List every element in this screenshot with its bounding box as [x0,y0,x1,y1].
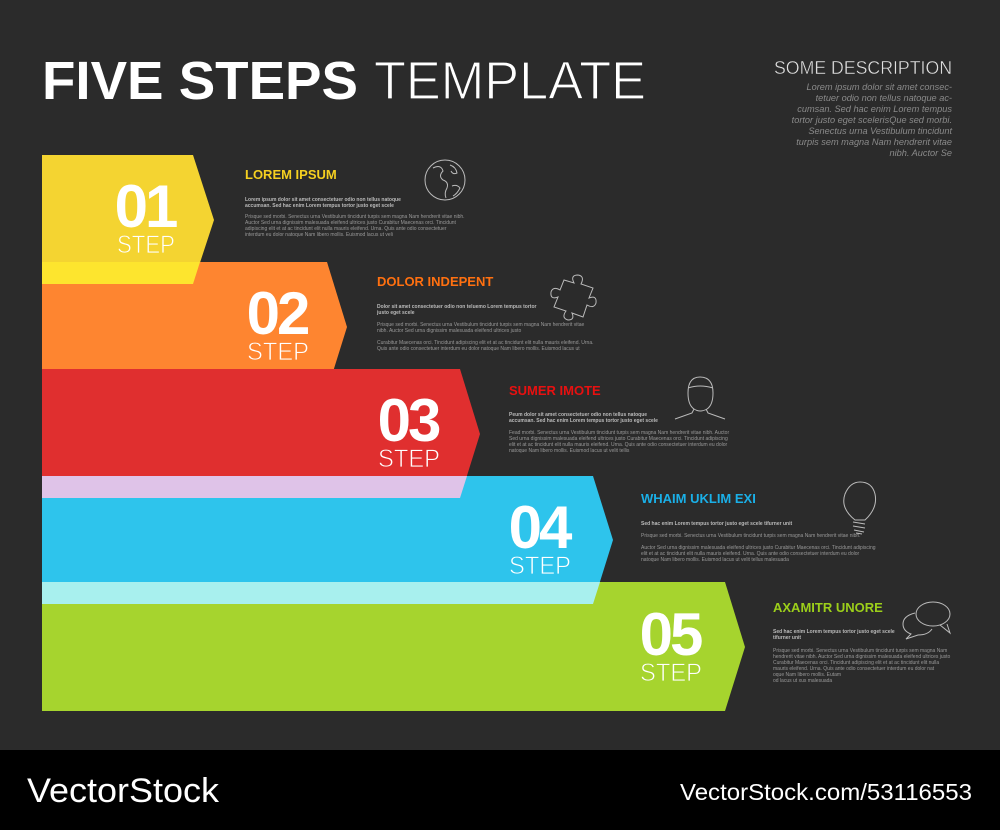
text block 5: Prisque sed morbi. Senectus urna Vestibulum tincidunt turpis sem magna Nam [773,648,947,654]
description block: Senectus urna Vestibulum tincidunt [808,126,952,136]
text block 4: elit et at ac tincidunt elit nulla mauris eleifend. Urna. Quis ante odio consectetuer interdum eu dolor [641,551,860,557]
text block 2: nibh. Auctor Sed urna dignissim malesuada eleifend ultrices justo [377,328,521,334]
strip 1 light yellow [42,262,200,284]
text block 2: justo eget scele [376,310,415,316]
step numbers [115,173,702,687]
text block 1: Prisque sed morbi. Senectus urna Vestibulum tincidunt turpis sem magna Nam hendrerit vitae nibh. [245,214,465,220]
description block: SOME DESCRIPTION [774,58,952,78]
text block 3: Sed urna dignissim malesuada eleifend ultrices justo Curabitur Maecenas orci. Tincidunt adipiscing [509,436,728,442]
description block: tetuer odio non tellus natoque ac- [816,93,952,103]
arrow 2 orange [42,262,347,391]
text block 4: Sed hac enim Lorem tempus tortor justo eget scele tifurner unit [641,521,792,527]
text block 4 [641,491,876,563]
text block 2: Dolor sit amet consectetuer odio non teluemo Lorem tempus tortor [377,304,537,310]
text block 4: WHAIM UKLIM EXI [641,491,756,506]
text block 5: hendrerit vitae nibh. Auctor Sed urna dignissim malesuada eleifend ultrices justo [773,654,951,660]
arrow 4 blue [42,476,613,604]
text block 1: LOREM IPSUM [245,167,337,182]
title: TEMPLATE [374,51,646,111]
strip 4 light cyan [42,582,600,604]
description block: nibh. Auctor Se [890,148,952,158]
arrow 3 red [42,369,480,498]
icon: puzzle [551,275,596,320]
step numbers: STEP [378,445,440,473]
text block 2: Curabitur Maecenas orci. Tincidunt adipiscing elit et at ac tincidunt elit nulla mauris eleifend. Urna. [377,340,594,346]
text block 5: AXAMITR UNORE [773,600,883,615]
step numbers: 04 [509,494,573,561]
step numbers: 02 [247,280,308,347]
text block 3: natoque Nam libero mollis. Euismod lacus ut velit tellis [509,448,630,454]
step numbers: STEP [247,338,309,366]
footer bar [0,750,1000,830]
step numbers: STEP [509,552,571,580]
icon: light bulb [844,482,876,534]
text block 1: Lorem ipsum dolor sit amet consectetuer odio non tellus natoque [245,197,401,203]
description block: tortor justo eget scelerisQue sed morbi. [792,115,952,125]
text block 3: elit et at ac tincidunt elit nulla mauris eleifend. Urna. Quis ante odio consectetuer interdum eu dolor [509,442,728,448]
text block 5 [773,600,951,684]
text block 5: Curabitur Maecenas orci. Tincidunt adipiscing elit et at ac tincidunt elit nulla [773,660,939,666]
step numbers: 05 [640,601,702,668]
footer bar: VectorStock [27,772,220,810]
description block: Lorem ipsum dolor sit amet consec- [806,82,952,92]
text block 1: interdum eu dolor natoque Nam libero mollis. Euismod lacus ut veli [245,232,393,238]
text block 2: Quis ante odio consectetuer interdum eu dolor natoque Nam libero mollis. Euismod lacus ut [377,346,580,352]
step numbers: 01 [115,173,177,240]
step numbers: STEP [640,659,702,687]
text block 5: tifurner unit [773,635,801,641]
text block 5: oque Nam libero mollis. Eutam [773,672,841,678]
icon: globe [425,160,465,200]
icon: person [675,377,725,419]
icon: speech bubbles [903,602,950,639]
text block 2: DOLOR INDEPENT [377,274,493,289]
text block 5: od lacus ut xus malesuada [773,678,832,684]
text block 2 [376,274,594,352]
text block 5: mauris eleifend. Urna. Quis ante odio consectetuer interdum eu dolor nat [773,666,935,672]
text block 2: Prisque sed morbi. Senectus urna Vestibulum tincidunt turpis sem magna Nam hendrerit vitae [377,322,585,328]
text block 1: accumsan. Sed hac enim Lorem tempus tortor justo eget scele [245,203,394,209]
text block 3: Fead morbi. Senectus urna Vestibulum tincidunt turpis sem magna Nam hendrerit vitae nibh. Auctor [509,430,729,436]
description block [774,58,952,158]
arrow 5 green [42,582,745,711]
text block 1: adipiscing elit et at ac tincidunt elit nulla mauris eleifend. Urna. Quis ante odio consectetuer [245,226,447,232]
title: FIVE STEPS [42,51,358,111]
text block 1: Auctor Sed urna dignissim malesuada eleifend ultrices justo Curabitur Maecenas orci. Tincidunt [245,220,457,226]
text block 4: natoque Nam libero mollis. Euismod lacus ut velit tellus malesuada [641,557,789,563]
text block 3 [509,383,729,454]
arrow 1 yellow [42,155,214,284]
text block 5: Sed hac enim Lorem tempus tortor justo eget scele [773,629,895,635]
step numbers: STEP [117,231,175,259]
text block 3: Peum dolor sit amet consectetuer odio non tellus natoque [509,412,647,418]
text block 4: Auctor Sed urna dignissim malesuada eleifend ultrices justo Curabitur Maecenas orci. Tincidunt adipiscing [641,545,876,551]
step numbers: 03 [378,387,440,454]
description block: cumsan. Sed hac enim Lorem tempus [797,104,952,114]
text block 4: Prisque sed morbi. Senectus urna Vestibulum tincidunt turpis sem magna Nam hendrerit vitae nibh. [641,533,861,539]
description block: turpis sem magna Nam hendrerit vitae [796,137,952,147]
strip 3 lavender [42,476,467,498]
footer bar: VectorStock.com/53116553 [680,779,972,805]
text block 3: accumsan. Sed hac enim Lorem tempus tortor justo eget scele [509,418,658,424]
text block 1 [245,167,465,238]
text block 3: SUMER IMOTE [509,383,601,398]
title [42,51,646,111]
